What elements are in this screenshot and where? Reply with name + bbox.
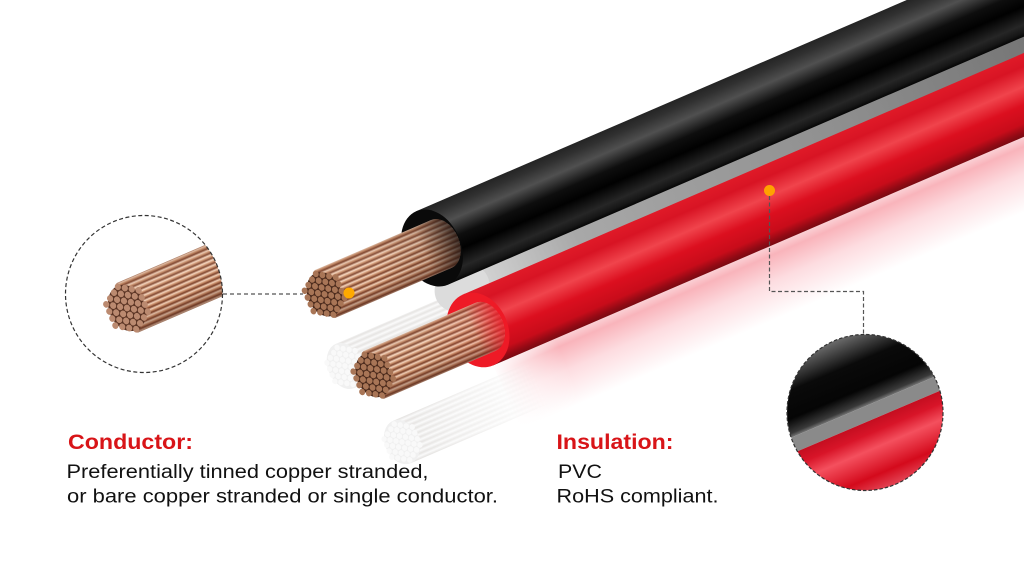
callout: conductor magnifier [64, 214, 224, 374]
exposed copper strands [314, 213, 468, 318]
magnified copper strands [103, 245, 222, 333]
copper end face [296, 263, 353, 326]
leader line: conductor [223, 293, 303, 295]
black jacket [390, 0, 1024, 296]
heading: conductor: Conductor: [68, 431, 193, 454]
text: conductor line 2: or bare copper stranded or single conductor. [67, 486, 498, 508]
exposed copper strands [363, 296, 512, 399]
callout: insulation magnifier [786, 334, 944, 492]
magnified jacket bands [787, 334, 943, 490]
dashed circle [787, 334, 943, 490]
text: insulation line 1: PVC [558, 462, 602, 483]
marker dot: insulation [764, 185, 775, 196]
leader line: insulation [770, 196, 864, 334]
gray reflection strip between cables [427, 0, 1024, 321]
marker dot: conductor [344, 288, 354, 298]
red insulated cable [340, 18, 1024, 418]
red jacket [435, 18, 1024, 377]
text: insulation line 2: RoHS compliant. [556, 486, 718, 508]
ghost reflection: upper copper strands [319, 295, 469, 395]
heading: insulation: Insulation: [556, 431, 674, 454]
black insulated cable [291, 0, 1024, 339]
ghost reflection: lower copper strands [384, 378, 512, 464]
red cable reflection [490, 47, 1024, 430]
copper end face [345, 344, 402, 406]
text: conductor line 1: Preferentially tinned copper stranded, [66, 462, 428, 483]
dashed circle [66, 216, 222, 372]
